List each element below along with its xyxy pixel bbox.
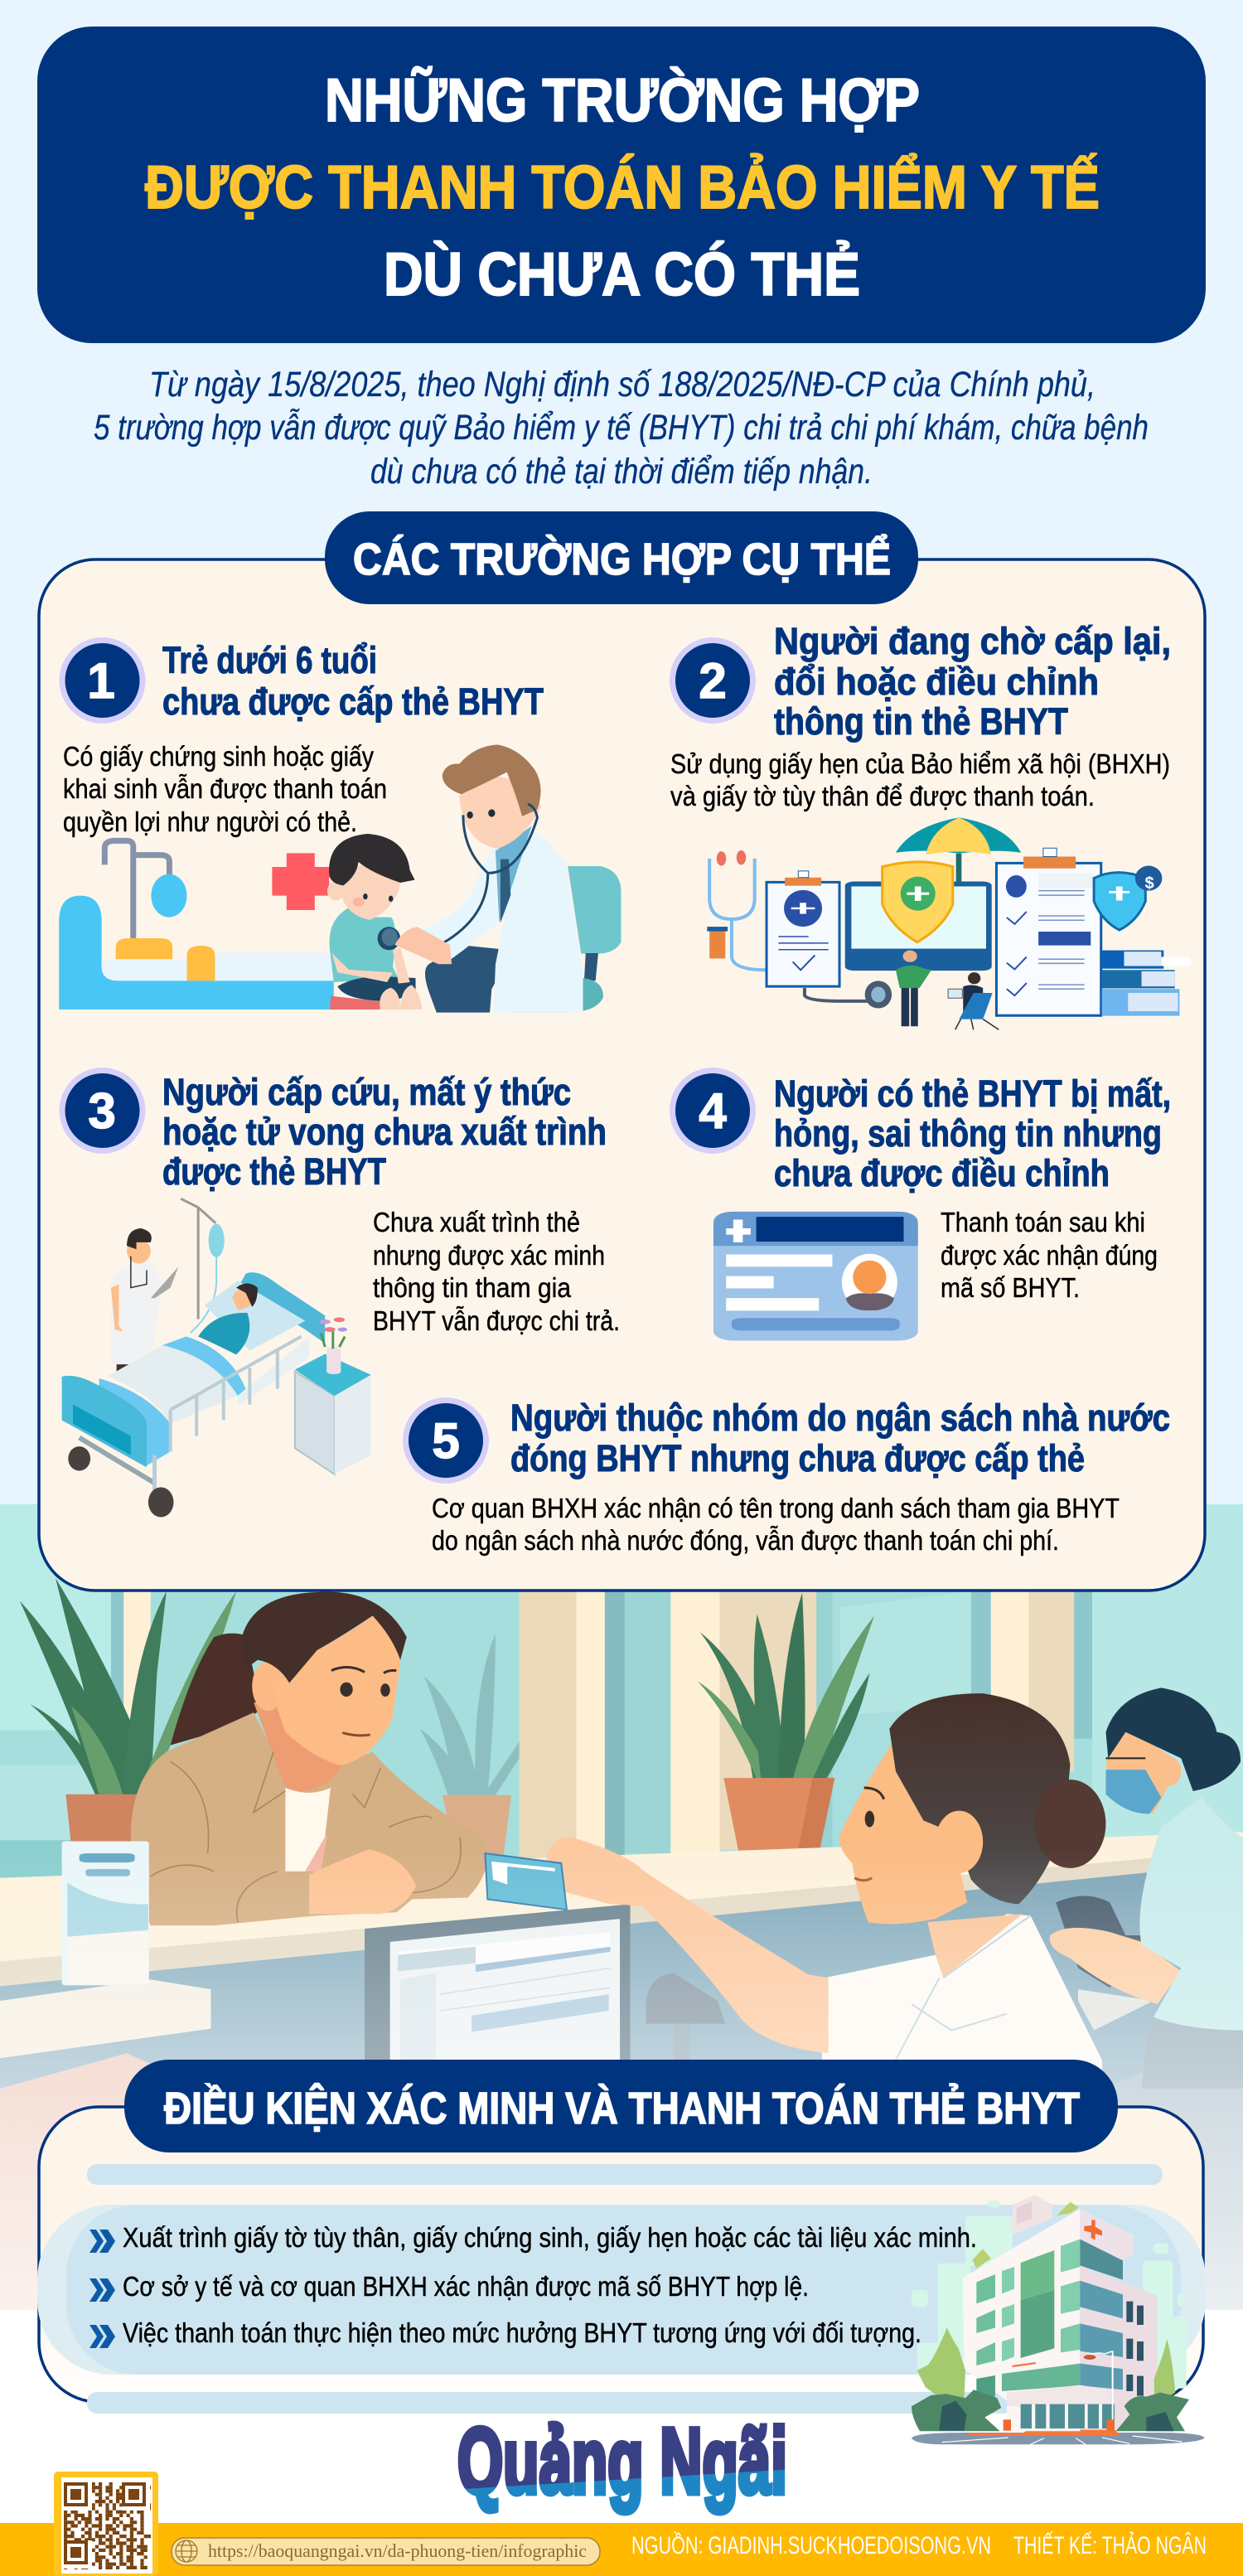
case 2 xyxy=(670,620,1191,1029)
section heading pill xyxy=(124,2060,1118,2152)
right plant xyxy=(698,1593,874,1866)
title text: ĐƯỢC THANH TOÁN BẢO HIỂM Y TẾ xyxy=(145,154,1100,221)
title text: NHỮNG TRƯỜNG HỢP xyxy=(325,67,920,134)
panel: specific cases xyxy=(39,511,1205,1591)
body case 1: quyền lợi như người có thẻ. xyxy=(63,806,357,837)
bullet icon 3 xyxy=(89,2325,115,2348)
number badge 1: 1 xyxy=(87,653,115,709)
QR code xyxy=(54,2472,158,2576)
body case 1: Có giấy chứng sinh hoặc giấy xyxy=(63,741,374,772)
panel: verification conditions xyxy=(37,2060,1206,2444)
body case 3: nhưng được xác minh xyxy=(373,1240,605,1271)
woman right holding card xyxy=(544,1693,1105,2089)
heading case 2: thông tin thẻ BHYT xyxy=(774,700,1068,743)
heading case 5: đóng BHYT nhưng chưa được cấp thẻ xyxy=(510,1437,1085,1479)
band bottom xyxy=(87,2392,1163,2414)
computer monitor xyxy=(365,1904,630,2089)
title text xyxy=(145,67,1100,308)
number badge 2 xyxy=(670,637,756,724)
section heading pill: CÁC TRƯỜNG HỢP CỤ THỂ xyxy=(353,535,891,584)
case 4 xyxy=(670,1068,1171,1341)
case 3 xyxy=(60,1068,620,1518)
intro text: dù chưa có thẻ tại thời điểm tiếp nhận. xyxy=(370,452,873,491)
brochure holder xyxy=(62,1841,149,1985)
hero illustration: clinic reception scene xyxy=(0,1504,1243,2310)
body case 1: khai sinh vẫn được thanh toán xyxy=(63,773,387,804)
body case 3: thông tin tham gia xyxy=(373,1272,572,1303)
case 5 xyxy=(403,1397,1170,1556)
content band inner xyxy=(66,2205,1181,2375)
bullet text 1: Xuất trình giấy tờ tùy thân, giấy chứng sinh, giấy hẹn hoặc các tài liệu xác minh. xyxy=(123,2222,977,2253)
band top xyxy=(87,2164,1163,2185)
number badge 3: 3 xyxy=(88,1083,116,1139)
woman left xyxy=(131,1592,487,1925)
heading case 1: chưa được cấp thẻ BHYT xyxy=(162,680,544,723)
body case 3 xyxy=(373,1207,620,1336)
left pot and plant xyxy=(20,1578,236,1847)
heading case 1 xyxy=(162,639,544,723)
nurse right xyxy=(1050,1687,1243,2089)
icon: insurance card xyxy=(713,1212,918,1341)
illustration: doctor examining child xyxy=(59,744,621,1013)
bullet text 3: Việc thanh toán thực hiện theo mức hưởng BHYT tương ứng với đối tượng. xyxy=(123,2317,921,2348)
heading case 2: Người đang chờ cấp lại, xyxy=(774,620,1171,662)
heading case 3: hoặc tử vong chưa xuất trình xyxy=(162,1111,607,1153)
body case 4: mã số BHYT. xyxy=(941,1272,1080,1303)
faded plant xyxy=(420,1634,520,1857)
globe icon xyxy=(176,2540,197,2562)
bullet list xyxy=(89,2222,977,2348)
number badge 3 xyxy=(60,1068,146,1154)
number badge 5: 5 xyxy=(432,1413,460,1469)
body case 2 xyxy=(670,748,1170,811)
insurance card in hand xyxy=(485,1853,567,1910)
illustration: insurance documents xyxy=(707,817,1191,1029)
body case 4: Thanh toán sau khi xyxy=(941,1207,1145,1237)
white lower background xyxy=(0,2310,1243,2576)
counter xyxy=(0,1832,1243,1962)
number badge 4: 4 xyxy=(699,1083,727,1139)
body case 5: do ngân sách nhà nước đóng, vẫn được thanh toán chi phí. xyxy=(432,1525,1059,1556)
title panel xyxy=(37,27,1206,343)
body case 4 xyxy=(941,1207,1158,1303)
intro text xyxy=(94,365,1149,491)
case 1 xyxy=(59,637,621,1013)
bullet icon 2 xyxy=(89,2278,115,2302)
content band outer xyxy=(37,2205,1206,2375)
body case 3: BHYT vẫn được chi trả. xyxy=(373,1305,620,1336)
heading case 3: được thẻ BHYT xyxy=(162,1150,386,1193)
number badge 4 xyxy=(670,1068,756,1154)
heading case 4 xyxy=(774,1073,1171,1194)
URL pill: https://baoquangngai.vn/da-phuong-tien/infographic xyxy=(208,2540,587,2561)
heading case 4: chưa được điều chỉnh xyxy=(774,1152,1110,1194)
number badge 2: 2 xyxy=(699,653,727,709)
number badge 5 xyxy=(403,1397,489,1484)
heading case 1: Trẻ dưới 6 tuổi xyxy=(162,639,377,681)
illustration: patient in hospital bed xyxy=(62,1198,371,1518)
section heading pill xyxy=(325,511,918,604)
logo: Quang Ngai newspaper: Quảng Ngãi xyxy=(457,2409,787,2513)
body case 1 xyxy=(63,741,387,837)
body case 4: được xác nhận đúng xyxy=(941,1240,1158,1271)
section heading pill: ĐIỀU KIỆN XÁC MINH VÀ THANH TOÁN THẺ BHYT xyxy=(164,2083,1080,2133)
body case 2: Sử dụng giấy hẹn của Bảo hiểm xã hội (BHXH) xyxy=(670,748,1170,779)
URL pill xyxy=(172,2538,600,2565)
footer bar xyxy=(0,2472,1243,2576)
heading case 3: Người cấp cứu, mất ý thức xyxy=(162,1071,571,1113)
source credit: NGUỒN: GIADINH.SUCKHOEDOISONG.VN xyxy=(631,2531,991,2559)
dark chair xyxy=(646,1973,725,2024)
illustration: hospital building xyxy=(912,2195,1204,2444)
bullet text 2: Cơ sở y tế và cơ quan BHXH xác nhận được mã số BHYT hợp lệ. xyxy=(123,2271,809,2302)
body case 5 xyxy=(432,1493,1120,1556)
body case 5: Cơ quan BHXH xác nhận có tên trong danh sách tham gia BHYT xyxy=(432,1493,1120,1523)
bullet icon 1 xyxy=(89,2230,115,2253)
number badge 1 xyxy=(60,637,146,724)
heading case 2 xyxy=(774,620,1171,743)
heading case 4: hỏng, sai thông tin nhưng xyxy=(774,1112,1162,1155)
heading case 2: đổi hoặc điều chỉnh xyxy=(774,661,1099,703)
body case 3: Chưa xuất trình thẻ xyxy=(373,1207,580,1237)
title text: DÙ CHƯA CÓ THẺ xyxy=(384,241,860,308)
hero fade overlay xyxy=(0,1848,1243,2310)
heading case 3 xyxy=(162,1071,607,1193)
heading case 4: Người có thẻ BHYT bị mất, xyxy=(774,1073,1171,1115)
heading case 5 xyxy=(510,1397,1170,1479)
body case 2: và giấy tờ tùy thân để được thanh toán. xyxy=(670,781,1095,811)
dollar sign: $ xyxy=(1144,874,1154,893)
